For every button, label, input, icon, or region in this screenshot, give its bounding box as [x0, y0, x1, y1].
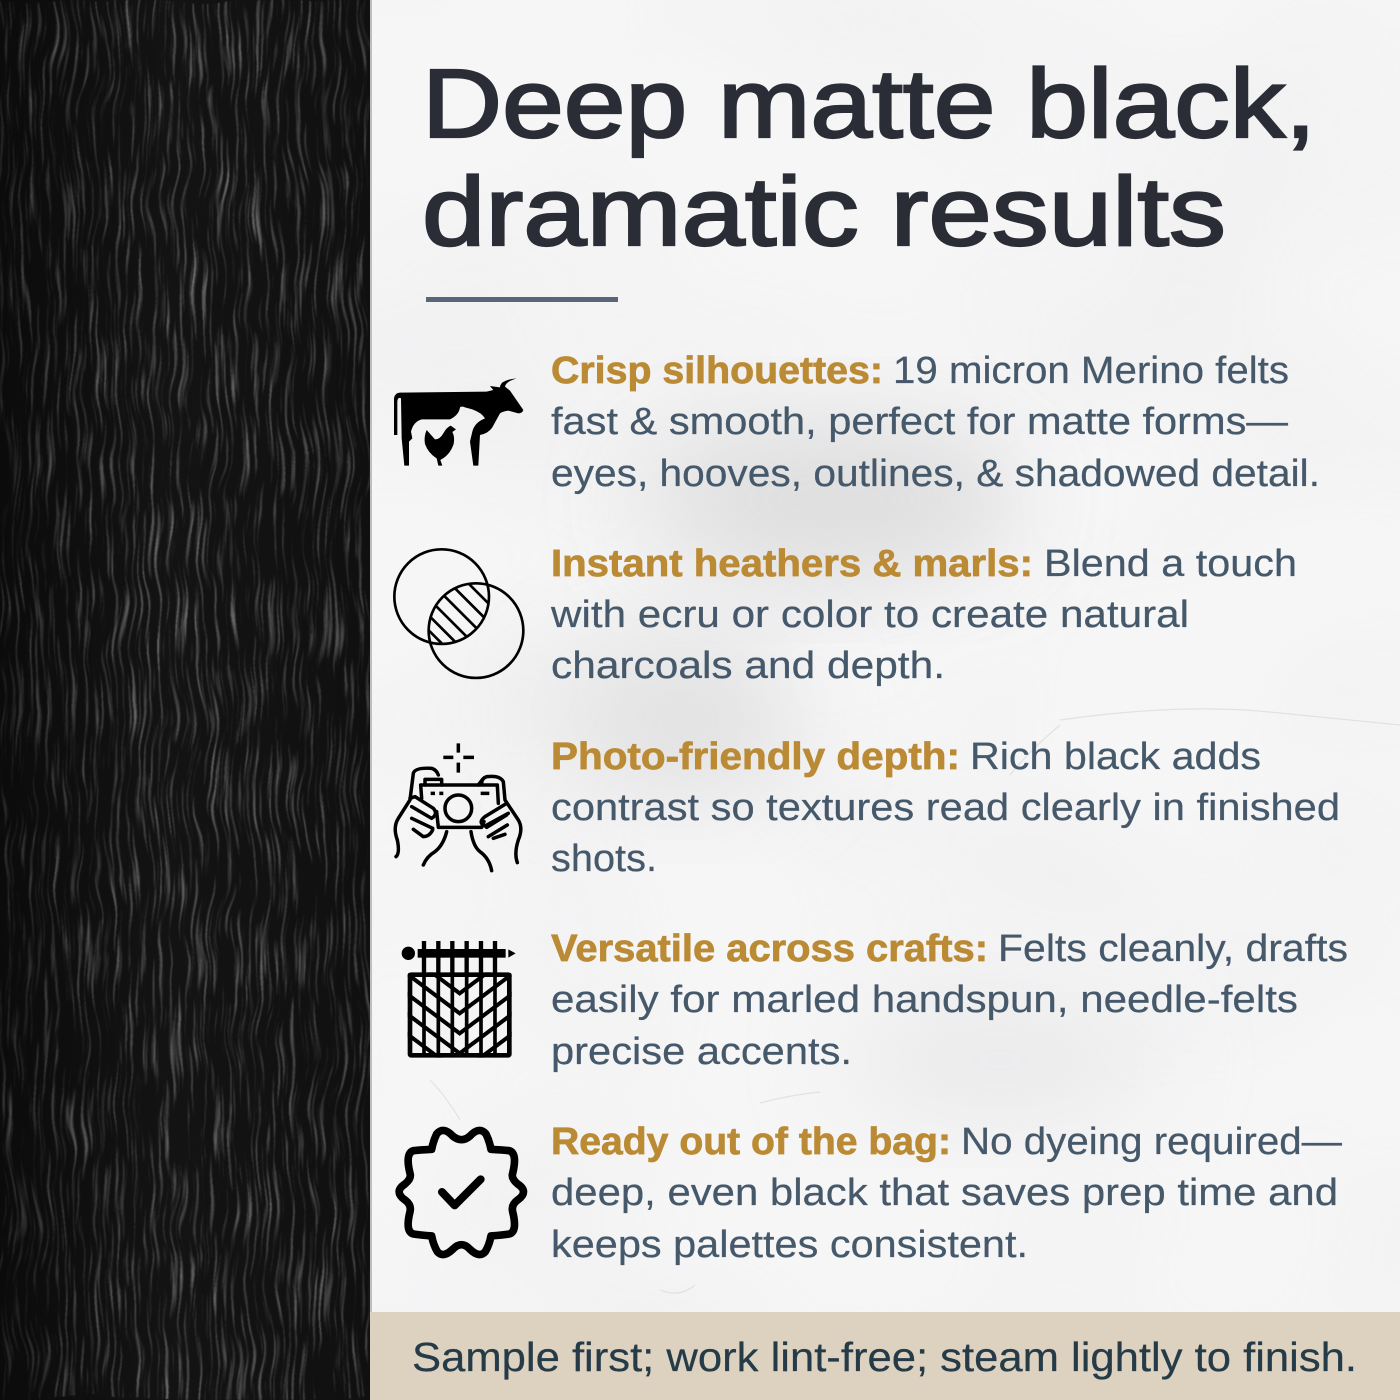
panel: marble background — [370, 0, 1400, 1400]
text: ready out of the bag — [551, 1121, 1342, 1266]
text: ready out of the bag: Ready out of the bag: — [551, 1121, 951, 1163]
text: versatile across crafts — [551, 928, 1348, 1073]
text: ready out of the bag: keeps palettes consistent. — [551, 1224, 1028, 1266]
text: instant heathers and marls: Blend a touch — [1044, 543, 1297, 585]
text: photo-friendly depth: shots. — [551, 838, 657, 880]
text: photo-friendly depth: contrast so textures read clearly in finished — [551, 787, 1340, 829]
text: photo-friendly depth — [551, 736, 1340, 880]
text: crisp silhouettes — [551, 350, 1320, 495]
text: instant heathers and marls: with ecru or color to create natural — [550, 594, 1189, 636]
text: photo-friendly depth: Rich black adds — [970, 736, 1261, 778]
text: crisp silhouettes: 19 micron Merino felts — [893, 350, 1289, 392]
icon: knitting on a needle — [402, 941, 516, 1058]
text: crisp silhouettes: fast & smooth, perfect for matte forms— — [551, 401, 1288, 443]
panel: black wool fibre photo — [0, 0, 370, 1400]
icon: hands holding camera — [395, 743, 521, 871]
text: ready out of the bag: No dyeing required— — [961, 1121, 1342, 1163]
text: crisp silhouettes: Crisp silhouettes: — [551, 350, 883, 392]
text: crisp silhouettes: eyes, hooves, outlines, & shadowed detail. — [551, 453, 1320, 495]
text: instant heathers and marls: Instant heathers & marls: — [551, 543, 1033, 585]
icon: verified badge with check — [399, 1130, 523, 1254]
title rule — [426, 297, 618, 302]
text: instant heathers and marls — [550, 543, 1297, 687]
text: versatile across crafts: easily for marled handspun, needle-felts — [551, 979, 1298, 1021]
footer band — [370, 1312, 1400, 1400]
footer band: Sample first; work lint-free; steam lightly to finish. — [412, 1334, 1357, 1380]
title — [422, 49, 1316, 266]
title: Deep matte black, — [422, 49, 1316, 158]
text: photo-friendly depth: Photo-friendly depth: — [551, 736, 960, 778]
icon: overlapping circles — [393, 548, 525, 680]
title: dramatic results — [422, 157, 1226, 266]
text: instant heathers and marls: charcoals and depth. — [551, 645, 945, 687]
icon: cow and chicken — [394, 378, 523, 466]
text: ready out of the bag: deep, even black that saves prep time and — [551, 1172, 1338, 1214]
text: versatile across crafts: Versatile across crafts: — [551, 928, 988, 970]
text: versatile across crafts: precise accents. — [551, 1031, 852, 1073]
text: versatile across crafts: Felts cleanly, drafts — [998, 928, 1348, 970]
